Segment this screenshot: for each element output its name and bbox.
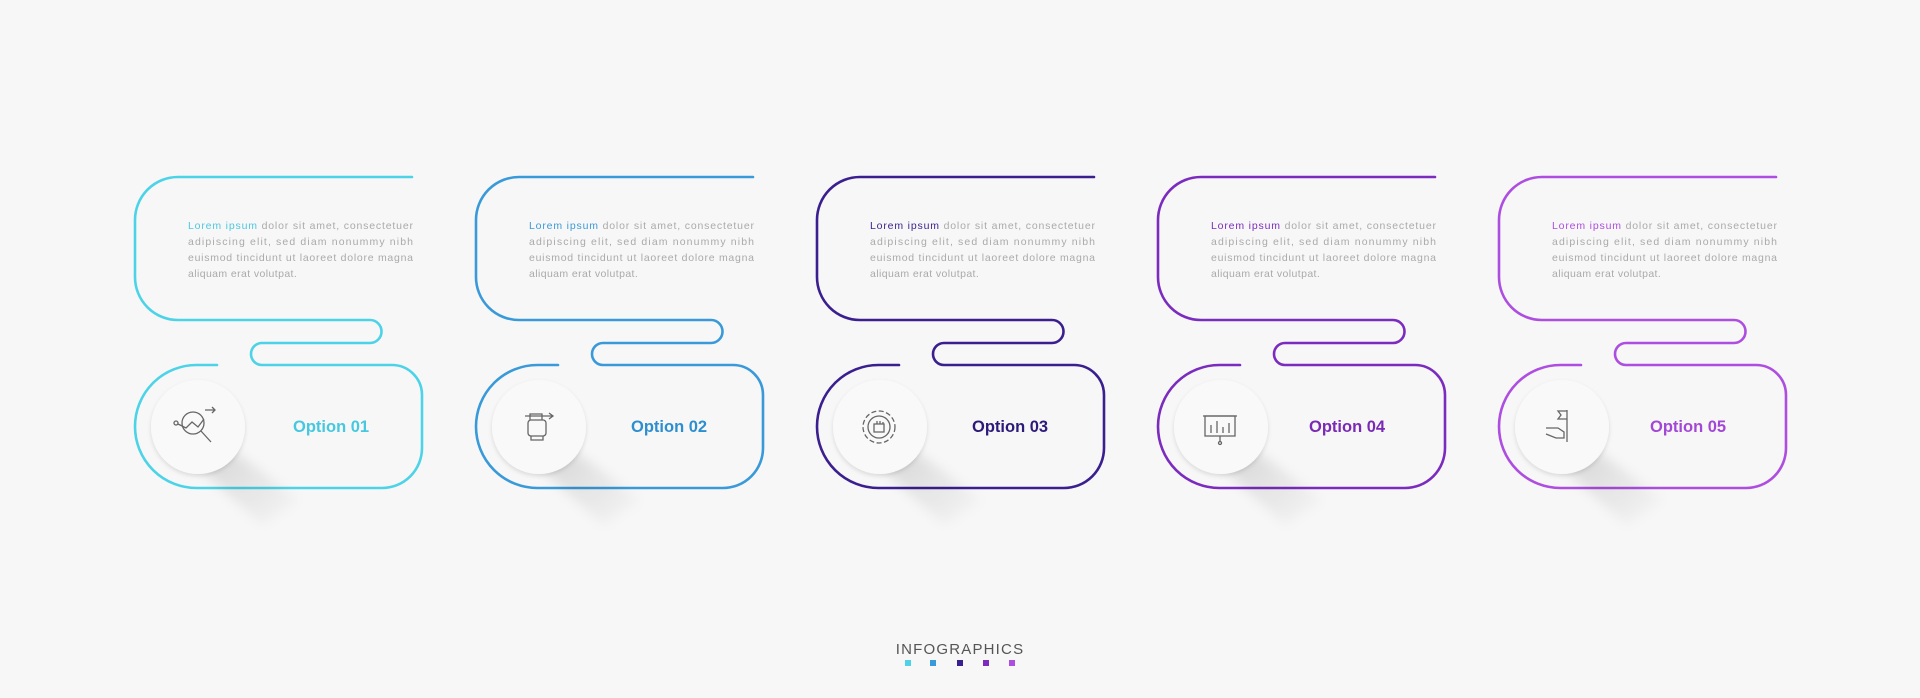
footer title [896,641,1024,666]
text block 04: euismod tincidunt ut laoreet dolore magna [1211,252,1436,264]
text block 02: adipiscing elit, sed diam nonummy nibh [529,236,754,248]
panel: option 02 [476,177,763,525]
text block 04: Lorem ipsum dolor sit amet, consectetuer [1211,220,1436,232]
icon circle 04 [1174,380,1323,525]
text block 01: aliquam erat volutpat. [188,268,297,280]
text block 04: aliquam erat volutpat. [1211,268,1320,280]
text block 02: euismod tincidunt ut laoreet dolore magna [529,252,754,264]
panel: option 01 [135,177,422,525]
text block 03: aliquam erat volutpat. [870,268,979,280]
text block 01: Lorem ipsum dolor sit amet, consectetuer [188,220,413,232]
text block 04: adipiscing elit, sed diam nonummy nibh [1211,236,1436,248]
text block 02: aliquam erat volutpat. [529,268,638,280]
text block 03: euismod tincidunt ut laoreet dolore magna [870,252,1095,264]
icon circle 05 [1515,380,1664,525]
text block 02: Lorem ipsum dolor sit amet, consectetuer [529,220,754,232]
text block 01: adipiscing elit, sed diam nonummy nibh [188,236,413,248]
label 04: Option 04 [1309,418,1386,436]
panel: option 05 [1499,177,1786,525]
icon circle 01 [151,380,300,525]
text block 05: adipiscing elit, sed diam nonummy nibh [1552,236,1777,248]
label 05: Option 05 [1650,418,1726,436]
footer title: INFOGRAPHICS [896,641,1024,658]
label 01: Option 01 [293,418,369,436]
icon circle 03 [833,380,982,525]
icon circle 02 [492,380,641,525]
panel: option 03 [817,177,1104,525]
text block 03: adipiscing elit, sed diam nonummy nibh [870,236,1095,248]
text block 03: Lorem ipsum dolor sit amet, consectetuer [870,220,1095,232]
panel: option 04 [1158,177,1445,525]
text block 01: euismod tincidunt ut laoreet dolore magna [188,252,413,264]
legend squares [905,660,1015,666]
text block 05: aliquam erat volutpat. [1552,268,1661,280]
label 02: Option 02 [631,418,707,436]
text block 05: Lorem ipsum dolor sit amet, consectetuer [1552,220,1777,232]
text block 05: euismod tincidunt ut laoreet dolore magna [1552,252,1777,264]
label 03: Option 03 [972,418,1048,436]
